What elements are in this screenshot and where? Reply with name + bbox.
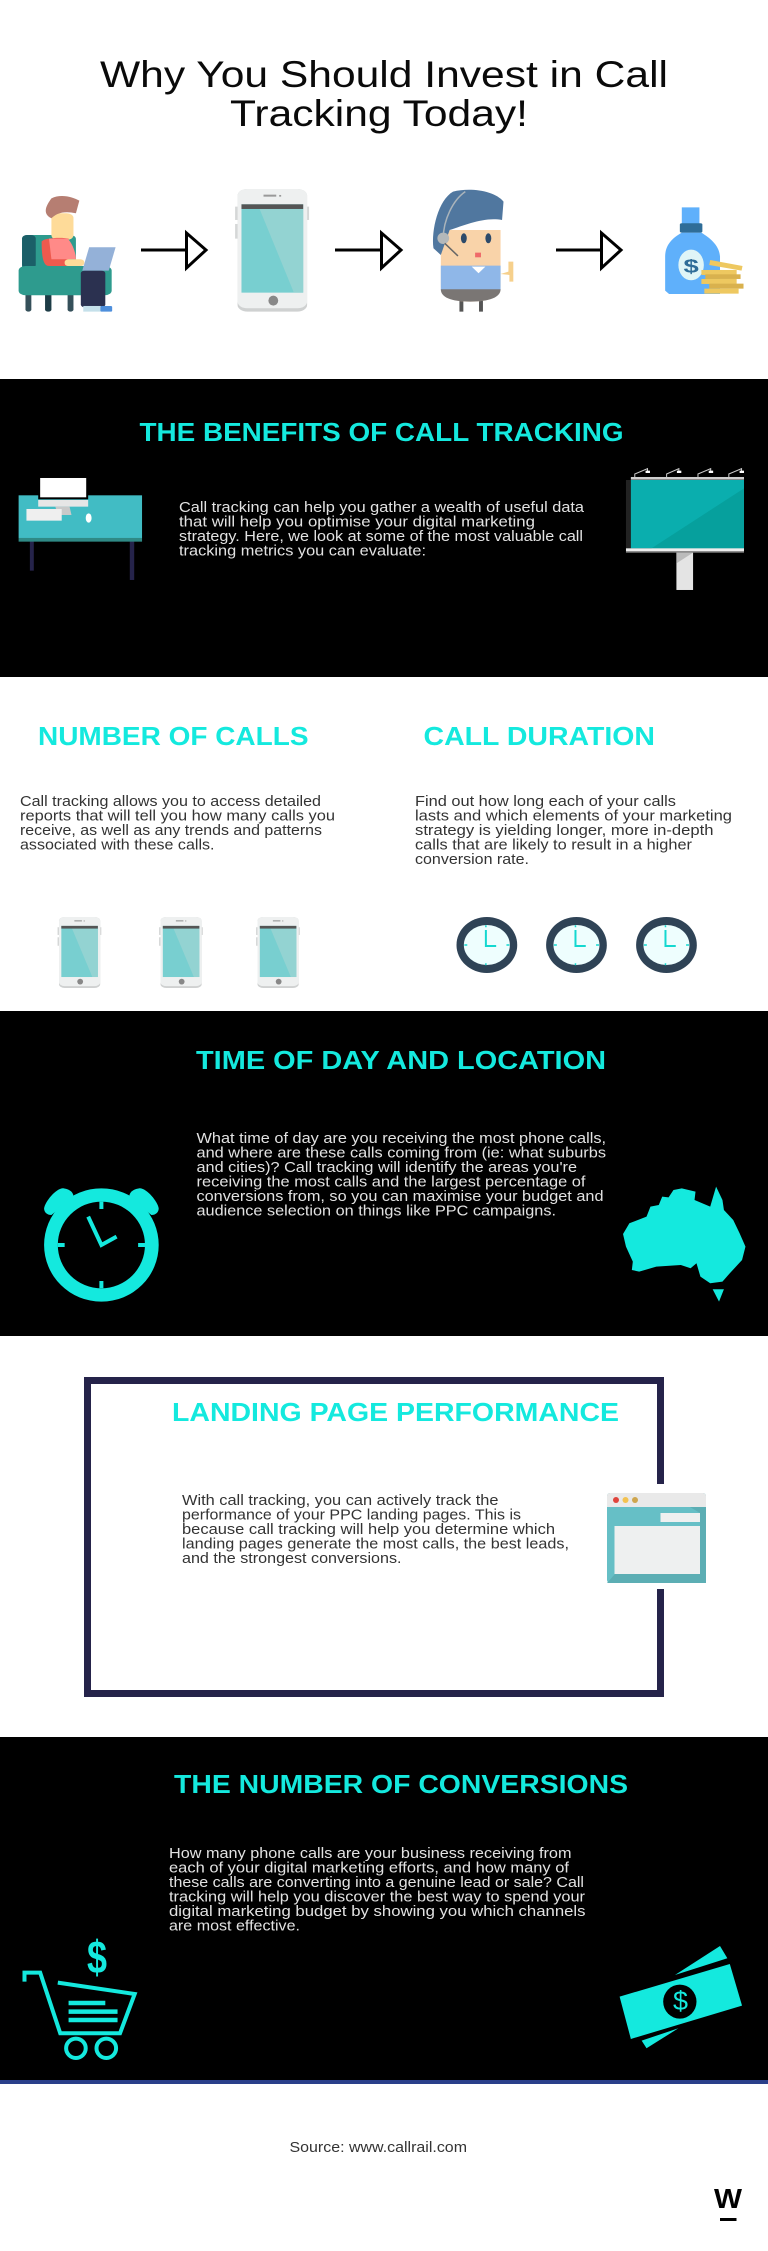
icon: Australia map (623, 1187, 745, 1302)
text: benefits intro: tracking metrics you can evaluate: (179, 542, 426, 560)
panel: call duration (415, 721, 732, 973)
heading: call duration: CALL DURATION (424, 721, 655, 751)
text: time of day (196, 1130, 606, 1220)
source: Source: www.callrail.com (290, 2139, 467, 2156)
title: Why You Should Invest in Call (100, 54, 668, 95)
text: number of calls: associated with these calls. (20, 836, 214, 854)
heading: number of calls: NUMBER OF CALLS (38, 721, 308, 751)
panel: landing page performance (88, 1380, 706, 1694)
text: conversions: tracking will help you discover the best way to spend your (169, 1888, 585, 1906)
text: call duration: strategy is yielding longer, more in-depth (415, 822, 714, 839)
text: time of day: and where are these calls coming from (ie: what suburbs (196, 1144, 606, 1162)
text: landing page: With call tracking, you can actively track the (182, 1492, 498, 1509)
icon: alarm clock (44, 1188, 159, 1302)
text: conversions: these calls are converting into a genuine lead or sale? Call (169, 1874, 584, 1891)
text: number of calls: Call tracking allows you to access detailed (20, 793, 321, 810)
title: Tracking Today! (230, 93, 528, 134)
text: landing page: because call tracking will help you determine which (182, 1521, 555, 1538)
text: call duration: conversion rate. (415, 851, 529, 868)
text: conversions: How many phone calls are your business receiving from (169, 1845, 572, 1862)
icon: browser window (607, 1493, 706, 1583)
text: landing page (182, 1492, 569, 1567)
text: landing page: and the strongest conversions. (182, 1550, 402, 1567)
logo: W (714, 2183, 743, 2214)
heading: time of day: TIME OF DAY AND LOCATION (196, 1045, 606, 1075)
icon: money bag (665, 207, 744, 294)
text: benefits intro: that will help you optimise your digital marketing (179, 514, 535, 530)
text: benefits intro: Call tracking can help you gather a wealth of useful data (179, 499, 585, 516)
panel: time of day and location (0, 1011, 768, 1336)
header panel (19, 54, 744, 312)
text: time of day: and cities)? Call tracking will identify the areas you're (196, 1159, 577, 1176)
icon: desk (19, 477, 142, 580)
icon: person on laptop (19, 196, 116, 312)
text: conversions (169, 1845, 586, 1934)
text: number of calls: receive, as well as any trends and patterns (20, 822, 322, 839)
arrow 2 (335, 233, 401, 268)
heading: benefits: THE BENEFITS OF CALL TRACKING (140, 417, 624, 447)
icon: phone (235, 189, 309, 312)
text: call duration: lasts and which elements of your marketing (415, 808, 732, 824)
text: time of day: audience selection on things like PPC campaigns. (196, 1202, 556, 1220)
text: number of calls (20, 793, 335, 854)
text: conversions: digital marketing budget by showing you which channels (169, 1903, 586, 1920)
icon: call agent (433, 190, 513, 312)
text: time of day: What time of day are you receiving the most phone calls, (196, 1130, 606, 1147)
icons: three phones (58, 917, 300, 988)
text: benefits intro: strategy. Here, we look at some of the most valuable call (179, 528, 583, 545)
text: benefits intro (179, 499, 585, 560)
heading: landing page: LANDING PAGE PERFORMANCE (172, 1397, 619, 1427)
text: call duration (415, 793, 732, 868)
icon: billboard (626, 469, 744, 590)
text: time of day: receiving the most calls and the largest percentage of (196, 1174, 586, 1190)
icon: banknotes (620, 1946, 742, 2048)
heading: conversions: THE NUMBER OF CONVERSIONS (174, 1769, 628, 1799)
text: call duration: Find out how long each of your calls (415, 793, 676, 810)
frame (88, 1380, 660, 1694)
panel: number of conversions (0, 1737, 768, 2080)
icon: shopping cart (24, 1931, 135, 2058)
arrow 1 (141, 233, 206, 268)
text: time of day: conversions from, so you can maximise your budget and (196, 1188, 604, 1205)
text: conversions: each of your digital marketing efforts, and how many of (169, 1860, 570, 1876)
text: call duration: calls that are likely to result in a higher (415, 836, 692, 854)
text: landing page: landing pages generate the most calls, the best leads, (182, 1536, 569, 1552)
icons: three clocks (456, 917, 697, 973)
panel: benefits (0, 379, 768, 677)
text: landing page: performance of your PPC landing pages. This is (182, 1506, 521, 1524)
title (100, 54, 668, 134)
panel: number of calls (20, 721, 335, 988)
icon: money bag: $ (683, 256, 699, 277)
text: conversions: are most effective. (169, 1918, 300, 1934)
icon: shopping cart: $ (87, 1931, 107, 1983)
text: number of calls: reports that will tell you how many calls you (20, 808, 335, 824)
icon: banknotes: $ (673, 1986, 688, 2016)
arrow 3 (556, 233, 621, 268)
divider strip (0, 2080, 768, 2084)
